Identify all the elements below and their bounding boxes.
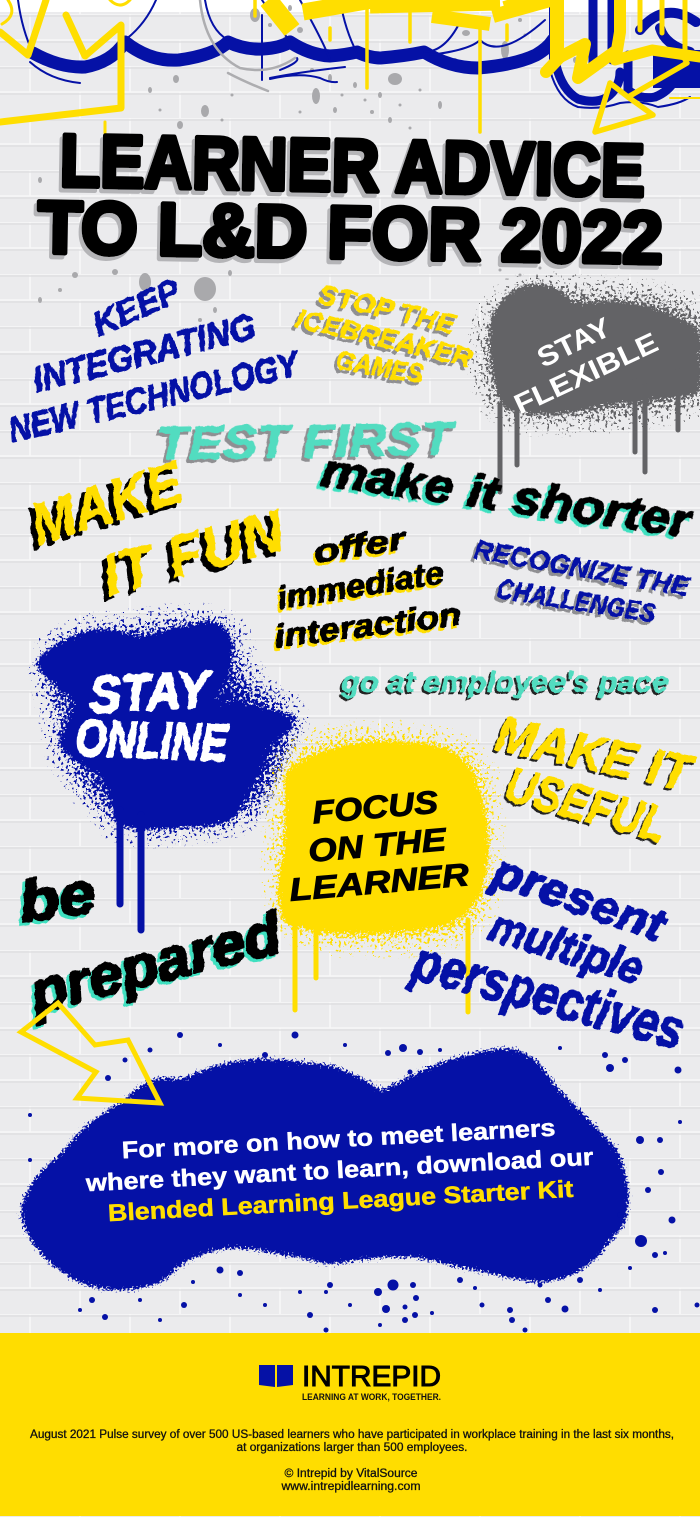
keep integrating new technology: INTEGRATING — [28, 305, 260, 400]
arrow pointing to call to action — [21, 1003, 160, 1103]
go at employee's pace: go at employee's pace — [340, 666, 669, 699]
survey note — [30, 1429, 674, 1454]
offer immediate interaction: immediate — [274, 554, 446, 616]
gray spray blob: stay flexible — [489, 283, 700, 492]
spray — [278, 741, 489, 934]
offer immediate interaction: interaction — [272, 596, 463, 654]
label: FLEXIBLE — [509, 327, 663, 420]
call to action text: Blended Learning League Starter Kit — [107, 1176, 574, 1227]
keep integrating new technology: KEEP — [87, 272, 187, 344]
call to action text: where they want to learn, download our — [84, 1144, 594, 1197]
logo — [259, 1361, 441, 1402]
make it shorter: make it shorter — [318, 444, 696, 547]
blue letters right — [550, 0, 690, 108]
footer panel — [0, 1333, 700, 1516]
title: TO L&D FOR 2022 — [37, 186, 664, 279]
top graffiti tag — [0, 0, 700, 145]
tagline: LEARNING AT WORK, TOGETHER. — [302, 1392, 441, 1402]
offer immediate interaction: offer — [311, 520, 410, 570]
drips — [295, 920, 468, 1012]
copyright and website: www.intrepidlearning.com — [280, 1481, 420, 1493]
blue spray blob: stay online — [33, 620, 300, 930]
thin arcs — [18, 0, 545, 80]
stop the icebreaker games: GAMES — [334, 345, 425, 390]
recognize the challenges: CHALLENGES — [495, 574, 658, 628]
copyright and website: © Intrepid by VitalSource — [284, 1468, 418, 1480]
icon: open book — [259, 1365, 293, 1387]
be prepared — [15, 860, 289, 1026]
present multiple perspectives: multiple — [484, 899, 650, 995]
call to action text — [84, 1115, 594, 1227]
test first: TEST FIRST — [156, 412, 458, 470]
be prepared: be — [15, 860, 99, 935]
yellow zigzag right — [550, 0, 564, 62]
blue spray cloud: call to action — [20, 1032, 700, 1332]
be prepared: prepared — [21, 900, 289, 1026]
label: ONLINE — [75, 709, 230, 773]
drips — [120, 810, 141, 930]
label: ON THE — [307, 821, 449, 869]
white top band — [0, 0, 700, 12]
label — [288, 784, 470, 908]
spray — [33, 620, 300, 830]
present multiple perspectives — [405, 844, 691, 1062]
title: LEARNER ADVICE — [59, 119, 646, 212]
spray — [489, 283, 700, 415]
label — [75, 661, 230, 773]
label: STAY — [532, 311, 616, 373]
recognize the challenges: RECOGNIZE THE — [472, 534, 692, 602]
stop the icebreaker games: ICEBREAKER — [293, 303, 476, 373]
label: STAY — [88, 661, 214, 725]
gray paint spatter — [38, 5, 577, 322]
wordmark: INTREPID — [302, 1361, 441, 1393]
make it fun: IT FUN — [95, 498, 292, 608]
make it fun: MAKE — [23, 449, 192, 557]
drips — [500, 370, 678, 492]
make it useful — [491, 705, 700, 853]
yellow spray blob: focus on the learner — [278, 741, 489, 1012]
offer immediate interaction — [272, 520, 463, 654]
label — [509, 311, 663, 420]
make it useful: MAKE IT — [491, 705, 700, 802]
copyright and website — [280, 1468, 420, 1493]
stop the icebreaker games: STOP THE — [315, 279, 460, 340]
spatter dots — [28, 1032, 700, 1332]
title — [37, 119, 664, 279]
present multiple perspectives: present — [485, 844, 674, 952]
blue swoosh — [33, 40, 553, 68]
yellow strokes left — [0, 0, 121, 122]
make it fun — [23, 449, 292, 608]
keep integrating new technology — [4, 272, 304, 450]
keep integrating new technology: NEW TECHNOLOGY — [4, 343, 304, 450]
survey note: August 2021 Pulse survey of over 500 US-based learners who have participated in workplace training in the last six months, — [30, 1429, 674, 1441]
label: LEARNER — [288, 856, 470, 908]
call to action text: For more on how to meet learners — [121, 1115, 556, 1164]
stop the icebreaker games — [293, 279, 476, 390]
yellow strokes top — [268, 0, 292, 30]
spray — [20, 1048, 629, 1290]
label: FOCUS — [311, 784, 440, 830]
survey note: at organizations larger than 500 employees. — [236, 1442, 468, 1454]
